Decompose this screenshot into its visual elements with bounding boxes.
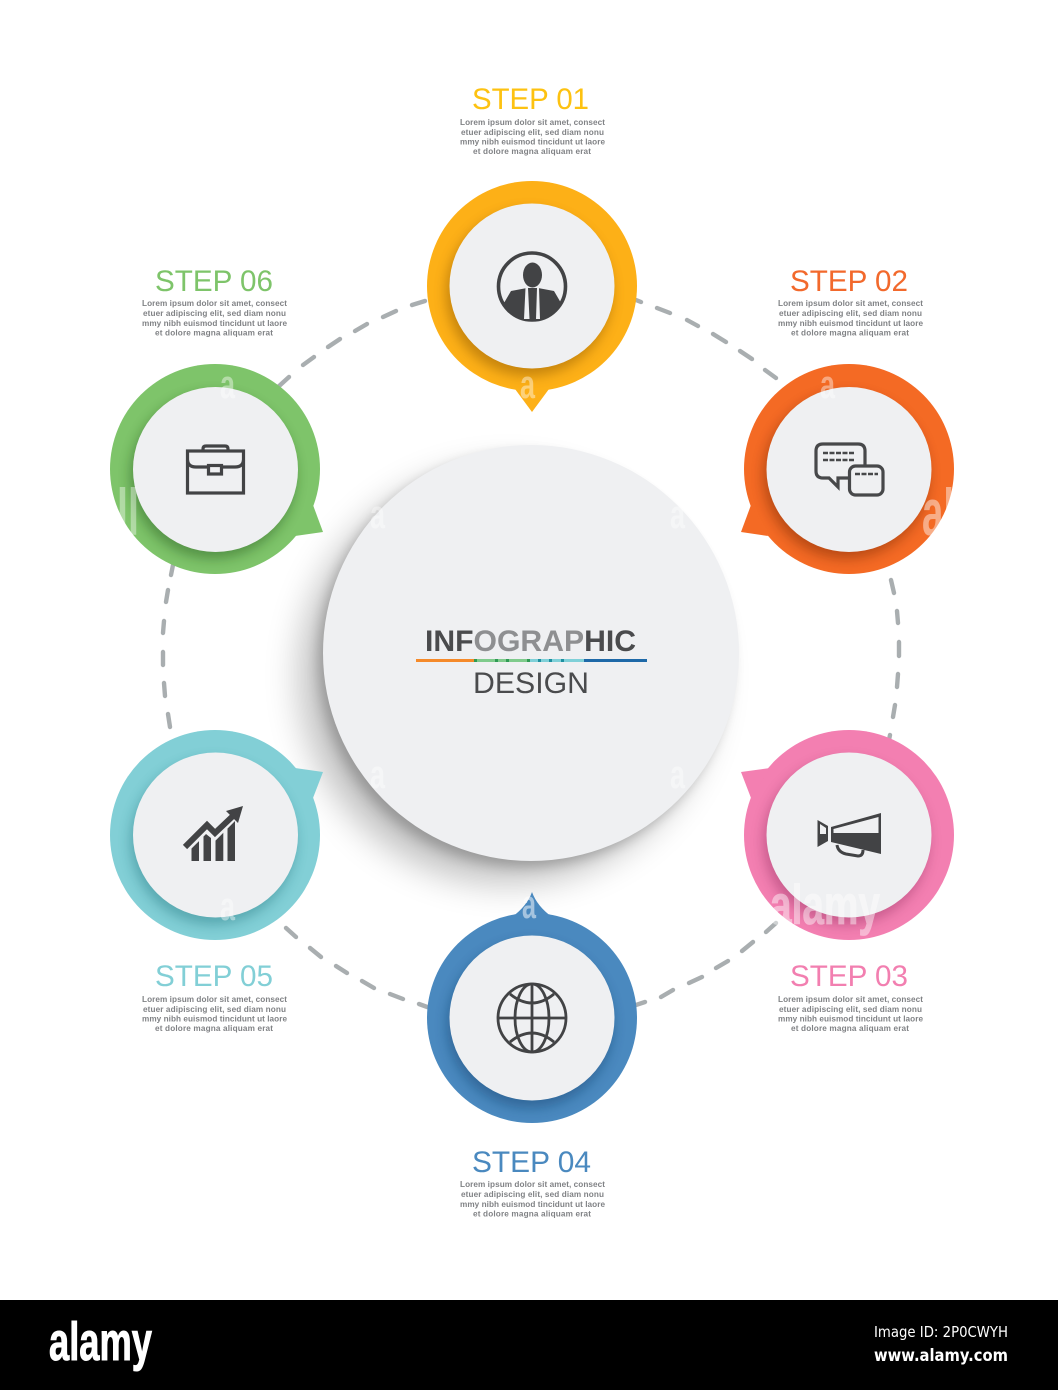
multicolor divider: [416, 659, 647, 662]
watermarks: a: [670, 493, 686, 537]
watermarks: a: [670, 753, 686, 797]
step 03 text: etuer adipiscing elit, sed diam nonu: [779, 1005, 922, 1014]
watermarks: alamy: [770, 873, 880, 936]
step 04 text: etuer adipiscing elit, sed diam nonu: [461, 1190, 604, 1199]
center title: infographic: INFOGRAPHIC: [425, 625, 636, 658]
footer image id: Image ID: 2P0CWYH: [874, 1323, 1008, 1341]
icon: globe: [498, 984, 566, 1052]
step 06 text: [142, 265, 287, 338]
footer bar: [0, 1300, 1058, 1390]
step 06 text: Lorem ipsum dolor sit amet, consect: [142, 299, 287, 308]
step 04 text: mmy nibh euismod tincidunt ut laore: [460, 1200, 605, 1209]
step 01 text: et dolore magna aliquam erat: [473, 147, 591, 156]
step 01 text: mmy nibh euismod tincidunt ut laore: [460, 138, 605, 146]
step 02 text: Lorem ipsum dolor sit amet, consect: [778, 299, 923, 308]
step 05 text: mmy nibh euismod tincidunt ut laore: [142, 1014, 287, 1024]
watermarks: [117, 363, 954, 936]
step 03 text: Lorem ipsum dolor sit amet, consect: [778, 995, 923, 1004]
step 06 text: mmy nibh euismod tincidunt ut laore: [142, 319, 287, 328]
footer url: www.alamy.com: [874, 1346, 1008, 1366]
watermarks: a: [370, 753, 386, 797]
step 03 text: mmy nibh euismod tincidunt ut laore: [778, 1014, 923, 1024]
step 01 badge: [427, 181, 637, 412]
step 03 badge: [741, 730, 954, 940]
step 05 badge: [110, 730, 323, 940]
icon: chat bubbles: [816, 444, 883, 495]
step 04 text: Lorem ipsum dolor sit amet, consect: [460, 1180, 605, 1189]
step 05 text: Lorem ipsum dolor sit amet, consect: [142, 995, 287, 1004]
step 03 text: STEP 03: [790, 960, 908, 993]
step 02 text: mmy nibh euismod tincidunt ut laore: [778, 319, 923, 328]
step 01 text: etuer adipiscing elit, sed diam nonu: [461, 128, 604, 137]
watermarks: a: [220, 885, 236, 929]
watermarks: a: [520, 363, 536, 407]
watermarks: a: [220, 363, 236, 407]
step 02 text: STEP 02: [790, 265, 908, 298]
icon: briefcase: [188, 446, 244, 493]
step 05 text: etuer adipiscing elit, sed diam nonu: [143, 1005, 286, 1014]
step 06 text: etuer adipiscing elit, sed diam nonu: [143, 309, 286, 318]
step 02 text: et dolore magna aliquam erat: [791, 328, 909, 338]
step 01 text: STEP 01: [472, 83, 589, 116]
icon: megaphone: [818, 813, 881, 856]
step 05 text: [142, 960, 287, 1033]
icon: businessman: [498, 253, 566, 325]
center circle shadow: [301, 453, 732, 882]
step 04 badge: [427, 892, 637, 1123]
step 06 text: STEP 06: [155, 265, 273, 298]
watermarks: ll: [117, 475, 139, 549]
watermarks: a: [370, 493, 386, 537]
step 04 text: STEP 04: [472, 1146, 591, 1179]
step 03 text: et dolore magna aliquam erat: [791, 1024, 909, 1033]
step 06 text: et dolore magna aliquam erat: [155, 328, 273, 338]
watermarks: al: [922, 475, 954, 549]
step 05 text: STEP 05: [155, 960, 273, 993]
step 05 text: et dolore magna aliquam erat: [155, 1024, 273, 1033]
dashed connecting ring: [163, 300, 899, 1008]
panel: center circle: [323, 445, 739, 861]
step 04 text: [460, 1146, 605, 1218]
step 04 text: et dolore magna aliquam erat: [473, 1210, 591, 1218]
step 02 text: etuer adipiscing elit, sed diam nonu: [779, 309, 922, 318]
step 01 text: [460, 83, 605, 156]
step 03 text: [778, 960, 923, 1033]
watermarks: a: [522, 883, 536, 927]
step 06 badge: [110, 364, 323, 574]
step 02 badge: [741, 364, 954, 574]
watermarks: a: [820, 363, 836, 407]
icon: growth chart: [185, 806, 243, 861]
step 02 text: [778, 265, 923, 338]
footer logo: alamy: alamy: [49, 1312, 152, 1372]
center subtitle: design: DESIGN: [473, 667, 589, 700]
step 01 text: Lorem ipsum dolor sit amet, consect: [460, 118, 605, 127]
